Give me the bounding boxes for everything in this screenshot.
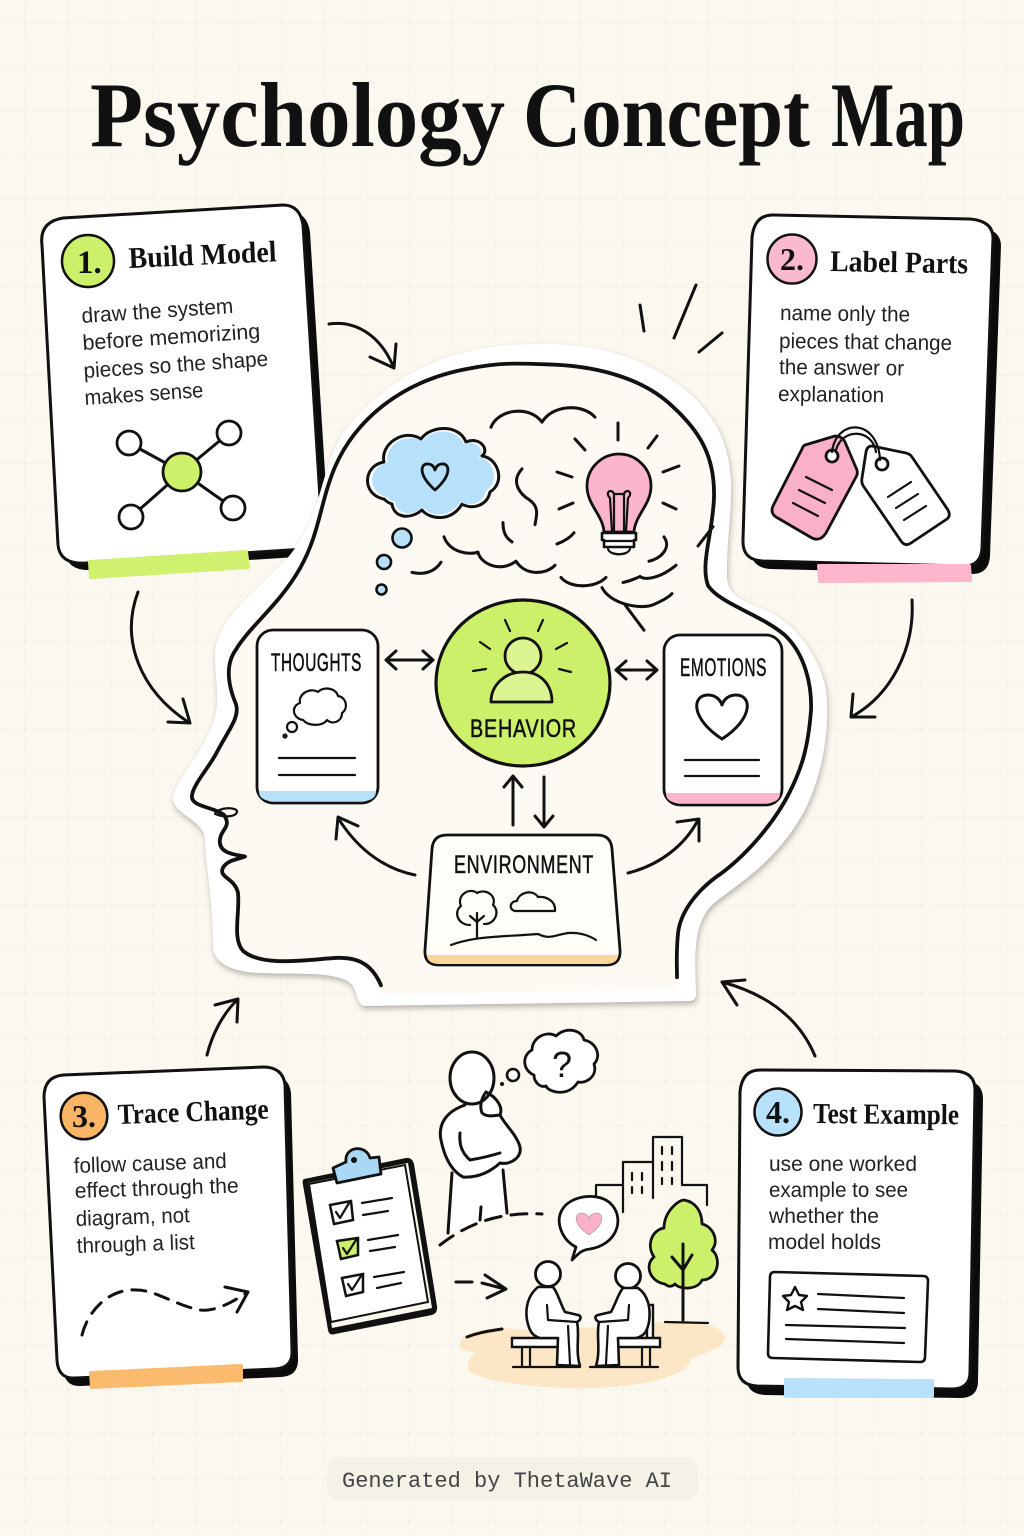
clip — [333, 1149, 381, 1183]
badge 2 — [768, 234, 816, 284]
body text: explanation — [778, 382, 884, 407]
badge 3 — [61, 1093, 107, 1139]
body text: diagram, not — [75, 1203, 190, 1231]
scene: thinking person — [440, 1030, 598, 1233]
badge 4: 4. — [766, 1094, 790, 1130]
head sticker — [173, 344, 827, 1006]
title: Map — [831, 64, 965, 166]
scene: buildings — [596, 1137, 707, 1212]
body text: model holds — [768, 1230, 881, 1254]
thought cloud question: ? — [552, 1044, 572, 1085]
title: Psychology — [90, 64, 505, 166]
icon: tags — [772, 427, 949, 545]
scene: seated person left — [526, 1262, 581, 1366]
tape: pink — [819, 566, 970, 581]
dashed arrow — [456, 1275, 506, 1298]
body text: pieces so the shape — [83, 347, 269, 383]
body text: the answer or — [779, 355, 904, 381]
icon: person — [491, 638, 552, 702]
label: behavior: BEHAVIOR — [470, 715, 577, 743]
body text: pieces that change — [779, 329, 952, 355]
tape: blue — [786, 1380, 932, 1396]
brain lines — [412, 408, 713, 630]
arrow: thoughts behavior — [386, 651, 433, 669]
body text — [778, 301, 952, 407]
body text: whether the — [768, 1204, 879, 1228]
badge 4 — [754, 1088, 802, 1136]
node: behavior — [436, 600, 610, 766]
icon: example card — [768, 1272, 928, 1362]
body text — [768, 1152, 917, 1254]
node: environment — [425, 835, 620, 965]
footer credit: Generated by ThetaWave AI — [342, 1469, 672, 1494]
icon: light bulb — [557, 423, 679, 554]
panel: 4 test example — [738, 1070, 983, 1398]
body text: follow cause and — [73, 1149, 227, 1178]
icon: blue thought cloud — [368, 428, 499, 518]
head outline — [192, 364, 811, 994]
scene: tree — [649, 1200, 717, 1323]
panel: 2 label parts — [743, 215, 1001, 581]
node: emotions — [664, 635, 782, 805]
arrow: behavior emotions — [616, 661, 657, 679]
body text — [73, 1149, 239, 1258]
body text: example to see — [769, 1178, 908, 1202]
footer credit — [327, 1457, 698, 1500]
icon: dashed path arrow — [82, 1287, 248, 1335]
arrow: behavior to environment — [535, 777, 553, 827]
body text: use one worked — [769, 1152, 917, 1176]
arrow: environment to behavior — [504, 776, 522, 825]
arrow: card 1 to head top — [329, 323, 396, 368]
badge 2: 2. — [780, 241, 804, 277]
sparks above head — [640, 285, 722, 352]
body text: makes sense — [84, 378, 204, 410]
scene: clipboard — [303, 1149, 437, 1334]
label: emotions: EMOTIONS — [680, 654, 767, 682]
thought cloud question — [500, 1030, 598, 1092]
panel: 1 build model — [42, 205, 329, 577]
dashed path — [440, 1214, 542, 1245]
heading: test example: Test Example — [813, 1098, 959, 1131]
label: thoughts: THOUGHTS — [271, 649, 362, 677]
scene: speech bubble heart — [559, 1196, 618, 1260]
thought bubbles — [376, 528, 412, 594]
badge 1: 1. — [77, 245, 102, 281]
body text: before memorizing — [82, 319, 261, 355]
scene: park ground — [460, 1321, 725, 1388]
icon: small cloud — [284, 689, 346, 738]
tape: green — [90, 552, 248, 577]
body text: effect through the — [74, 1174, 239, 1203]
scene: benches — [512, 1305, 660, 1367]
badge 1 — [62, 235, 114, 287]
arrow: card 4 to head — [722, 980, 815, 1056]
heading: build model: Build Model — [128, 235, 277, 275]
body text: name only the — [780, 301, 910, 327]
arrow: card 2 to head — [851, 600, 912, 717]
body text: draw the system — [81, 294, 234, 328]
body text — [81, 294, 269, 410]
label: environment: ENVIRONMENT — [454, 851, 594, 879]
icon: network — [117, 421, 245, 529]
panel: 3 trace change — [44, 1067, 298, 1387]
icon: heart — [697, 695, 747, 739]
heading: trace change: Trace Change — [117, 1093, 269, 1131]
badge 3: 3. — [72, 1098, 96, 1134]
node: thoughts — [257, 630, 378, 803]
heading: label parts: Label Parts — [830, 245, 968, 280]
arrow: environment to thoughts — [336, 817, 415, 875]
icon: tree and cloud — [451, 891, 596, 945]
arrow: card 3 to head — [207, 999, 238, 1055]
tape: orange — [91, 1366, 241, 1387]
title: Concept — [523, 64, 810, 166]
body text: through a list — [76, 1230, 195, 1258]
arrow: card 1 to head — [131, 592, 190, 723]
scene: seated person right — [595, 1264, 650, 1366]
title — [90, 64, 965, 166]
checklist — [330, 1198, 404, 1296]
arrow: environment to emotions — [628, 819, 699, 873]
